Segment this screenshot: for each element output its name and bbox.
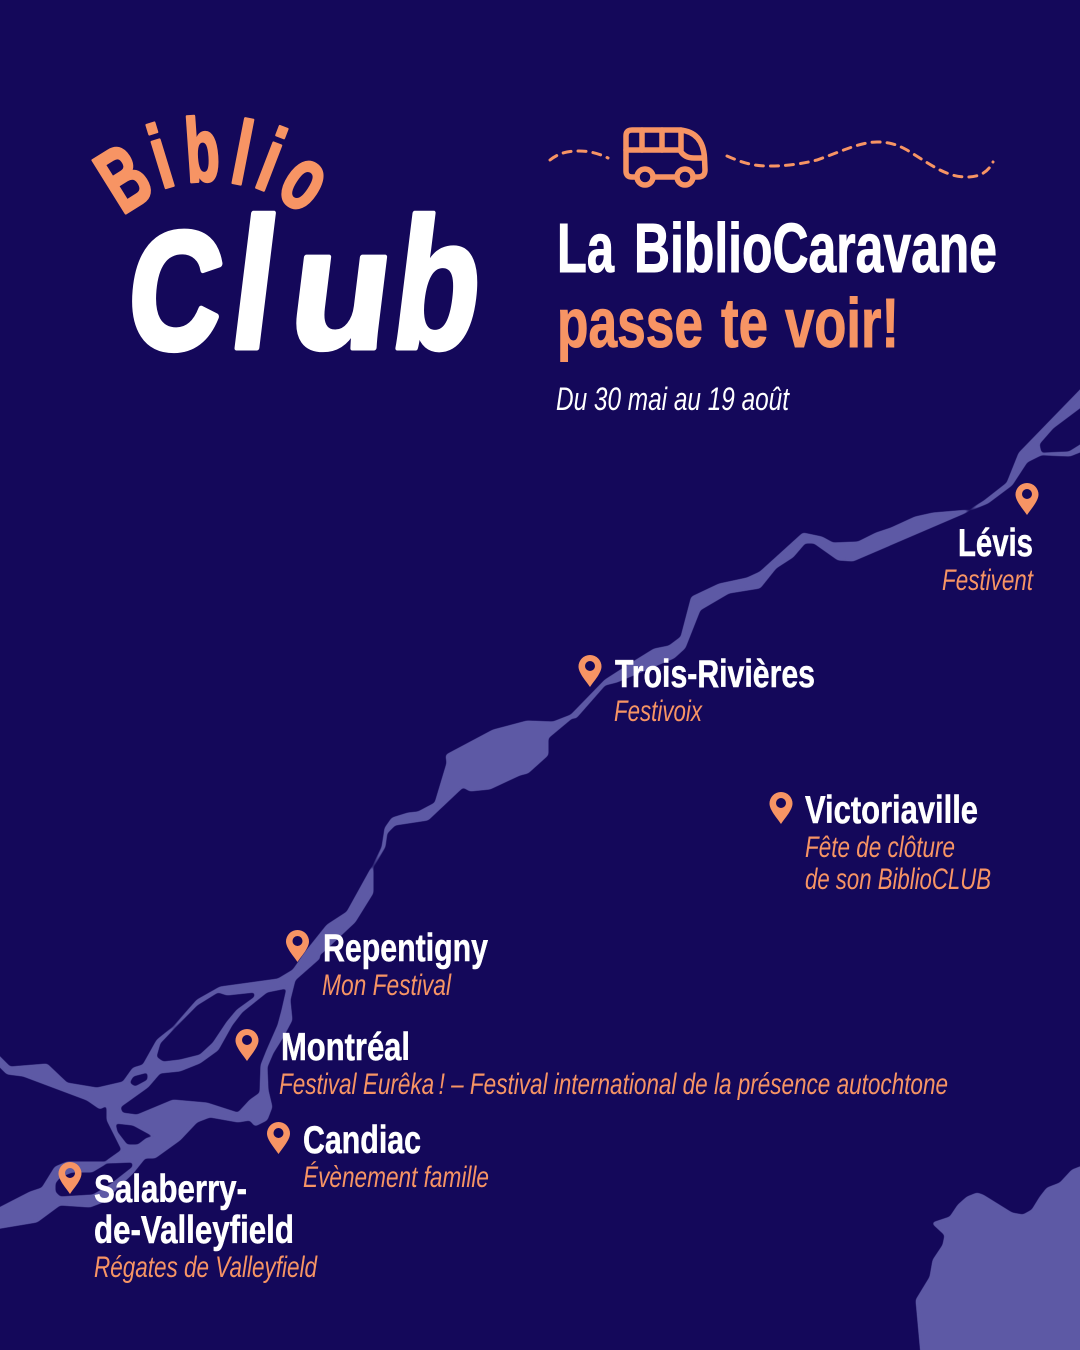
river: upper St. Lawrence [293,385,1080,970]
stop: Repentigny: Repentigny [323,927,488,970]
icon: pin Salaberry-de-Valleyfield [58,1162,82,1194]
stop: Trois-Rivières: Festivoix [614,695,703,728]
stop: Victoriaville: de son BiblioCLUB [805,863,991,896]
logo word: Club [122,180,495,388]
stop: Salaberry-de-Valleyfield [58,1162,318,1284]
title: passe [557,284,703,362]
title: voir! [785,284,899,362]
stop: Victoriaville [770,789,991,896]
logo word: Biblio: b [182,100,223,202]
stop: Candiac: Candiac [303,1119,421,1162]
icon: pin Trois-Rivières [578,655,602,687]
estuary: bottom right land mass [916,1165,1080,1350]
title: La [557,209,615,287]
logo word: Club: C [122,198,230,384]
icon: bus [626,130,705,185]
stop: Victoriaville: Fête de clôture [805,831,955,864]
icon: pin Victoriaville [770,792,792,824]
stop: Lévis [942,483,1038,597]
stop: Repentigny: Mon Festival [322,969,452,1002]
stop: Montréal: Montréal [281,1026,410,1069]
stop: Trois-Rivières [578,653,815,728]
stop: Lévis: Festivent [942,564,1034,597]
dates: Du 30 mai au 19 août [556,381,790,417]
stop: Lévis: Lévis [958,522,1033,565]
stop: Salaberry-de-Valleyfield: de-Valleyfield [94,1209,294,1252]
dashed route left of bus [550,151,608,160]
logo word: Biblio [80,100,348,232]
logo word: Club: b [383,180,495,388]
logo word: Biblio: l [225,103,260,205]
logo word: Biblio: o [263,128,348,232]
stop: Salaberry-de-Valleyfield: Régates de Valleyfield [94,1251,318,1284]
logo word: Club: l [221,180,289,388]
logo word: Biblio: i [138,108,184,208]
title [557,209,997,362]
stop: Trois-Rivières: Trois-Rivières [615,653,815,696]
logo word: Club: u [280,193,404,385]
logo: Biblio Club [80,100,495,388]
title: te [721,284,768,362]
logo word: Biblio: B [80,125,168,232]
icon: pin Repentigny [286,930,309,962]
stop: Repentigny [286,927,488,1002]
icon: pin Candiac [267,1122,290,1154]
map: river and estuary [0,385,1080,1350]
river: Montreal archipelago [0,952,320,1229]
stop: Victoriaville: Victoriaville [805,789,978,832]
dashed route right of bus [727,142,993,177]
stop: Candiac [267,1119,489,1194]
icon: pin Lévis [1016,483,1038,515]
stop: Candiac: Évènement famille [303,1161,489,1194]
logo word: Biblio: i [245,111,297,211]
icon: pin Montréal [236,1029,258,1061]
stop: Montréal [236,1026,948,1101]
stop: Salaberry-de-Valleyfield: Salaberry- [94,1168,247,1211]
